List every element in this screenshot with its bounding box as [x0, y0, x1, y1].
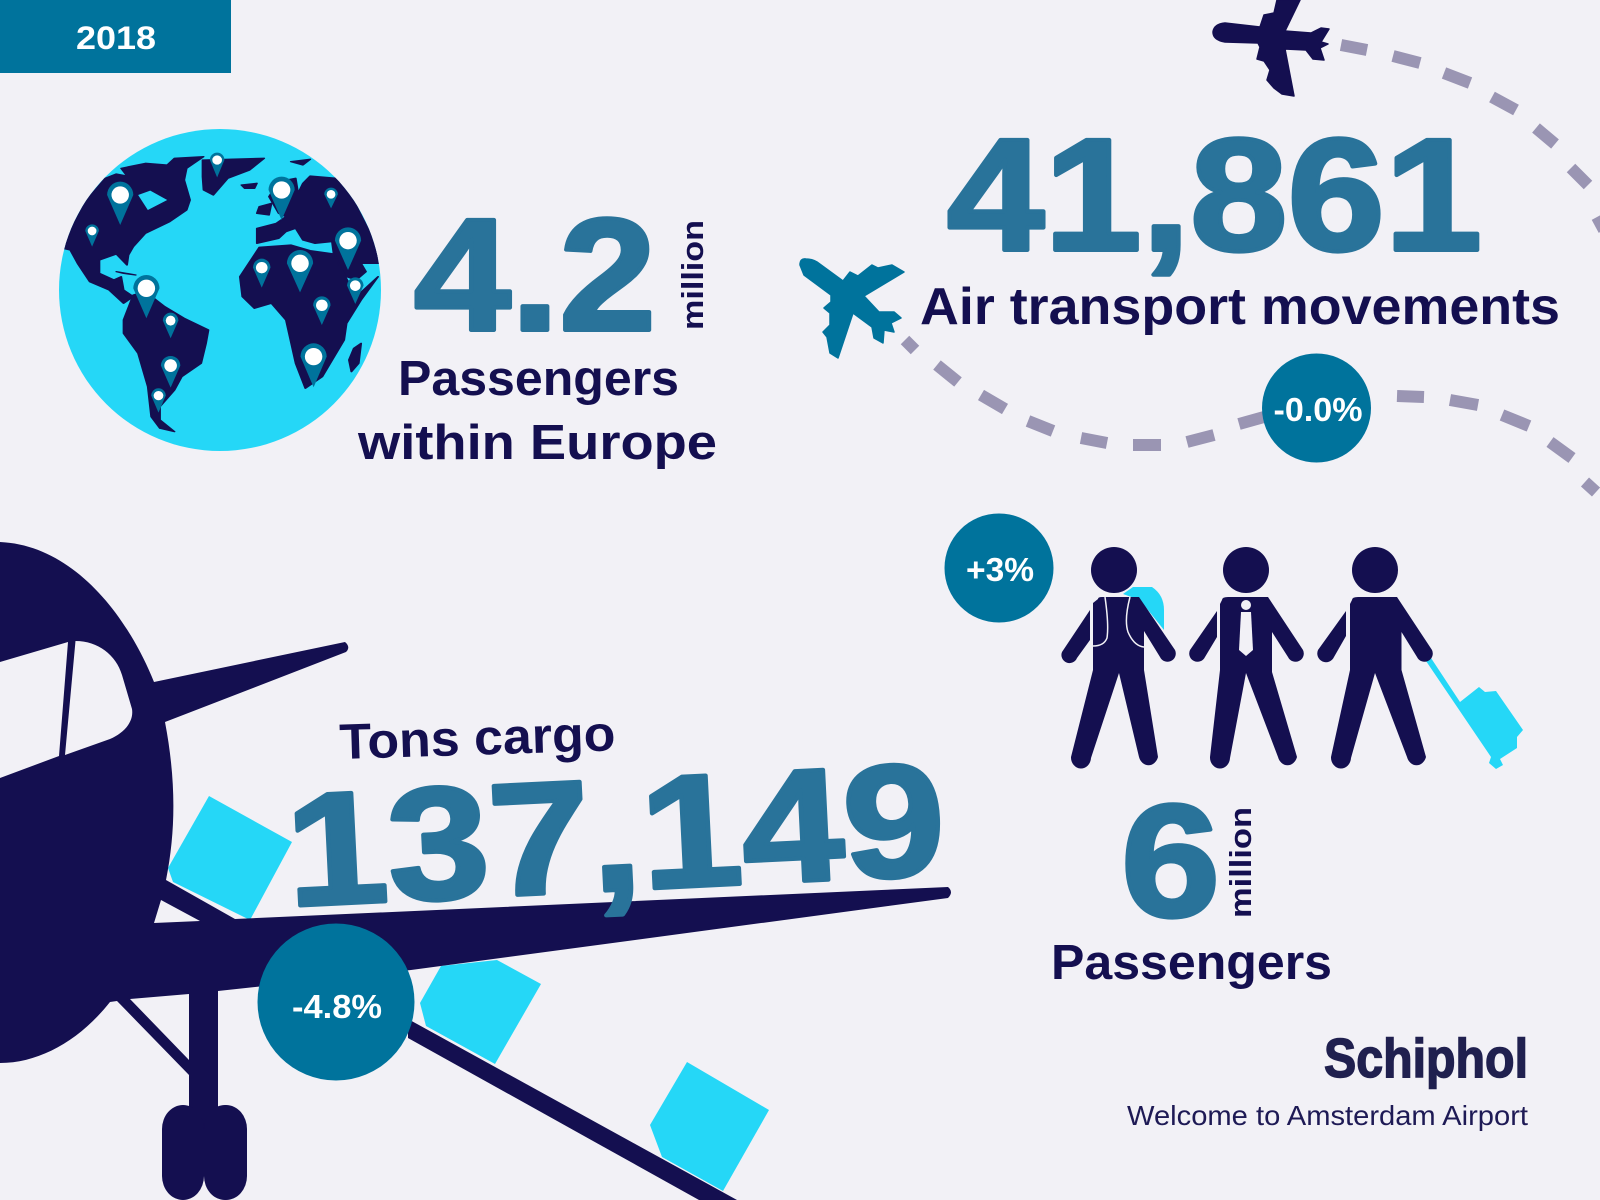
year banner: [0, 0, 231, 73]
stat: tons cargo heading: Tons cargo: [339, 705, 616, 770]
badge: -0.0%: -0.0%: [1274, 391, 1362, 428]
logo: Schiphol: [1127, 1027, 1528, 1131]
stat: 41,861 air transport movements: [920, 105, 1560, 336]
stat: 6 million passengers: million: [1223, 807, 1258, 918]
badge: -4.8%: [258, 924, 414, 1080]
icon: large airplane silhouette: [0, 542, 951, 1200]
stat: 4.2 million passengers within Europe: 4.2: [414, 185, 656, 364]
stat: 4.2 million passengers within Europe: within Europe: [357, 416, 717, 470]
icon: navy airplane: [1213, 0, 1329, 96]
stat: 41,861 air transport movements: Air transport movements: [920, 278, 1560, 336]
logo: Schiphol: Welcome to Amsterdam Airport: [1127, 1100, 1528, 1131]
stat: 6 million passengers: [1051, 771, 1332, 990]
icon: traveller with rolling suitcase: [1317, 547, 1523, 769]
badge: -0.0%: [1262, 354, 1371, 462]
stat: 41,861 air transport movements: 41,861: [947, 105, 1482, 284]
icon: traveller with backpack: [1061, 547, 1176, 768]
stat: 6 million passengers: Passengers: [1051, 936, 1332, 990]
stat: 4.2 million passengers within Europe: million: [675, 220, 710, 330]
icon: cargo boxes: [168, 796, 769, 1191]
badge: -4.8%: -4.8%: [292, 988, 382, 1025]
badge: +3%: [944, 514, 1054, 622]
icon: world globe with location pins: [59, 129, 381, 451]
badge: +3%: +3%: [966, 551, 1034, 588]
stat: 137,149: 137,149: [282, 729, 949, 940]
logo: Schiphol: Schiphol: [1324, 1027, 1528, 1089]
year banner: 2018: [76, 20, 156, 56]
dashed flight path: [905, 45, 1600, 492]
icon: teal airplane: [800, 259, 904, 358]
stat: 4.2 million passengers within Europe: [357, 185, 717, 470]
icon: business traveller with tie: [1189, 547, 1304, 769]
stat: 6 million passengers: 6: [1121, 771, 1220, 950]
stat: 4.2 million passengers within Europe: Passengers: [398, 352, 679, 406]
